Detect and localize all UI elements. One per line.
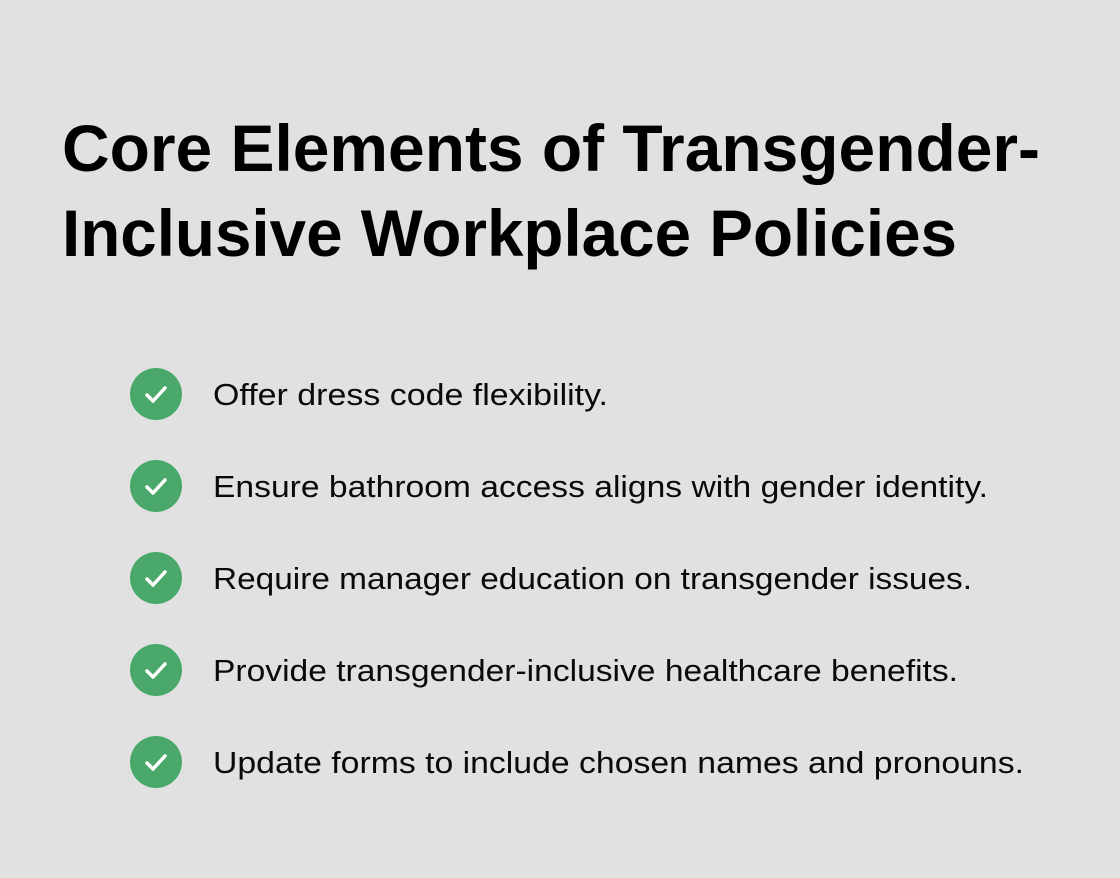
item 2: [130, 460, 988, 512]
icon: check: [130, 368, 182, 420]
title: Inclusive Workplace Policies: [62, 196, 957, 270]
text: Offer dress code flexibility.: [213, 377, 608, 412]
icon: check: [130, 736, 182, 788]
text: Update forms to include chosen names and pronouns.: [213, 745, 1024, 780]
item 1: [130, 368, 608, 420]
title: [62, 111, 1040, 270]
text: Require manager education on transgender issues.: [213, 561, 972, 596]
icon: check: [130, 644, 182, 696]
item 4: [130, 644, 958, 696]
text: Provide transgender-inclusive healthcare benefits.: [213, 653, 958, 688]
text: Ensure bathroom access aligns with gender identity.: [213, 469, 988, 504]
item 5: [130, 736, 1024, 788]
icon: check: [130, 460, 182, 512]
item 3: [130, 552, 972, 604]
title: Core Elements of Transgender-: [62, 111, 1040, 185]
icon: check: [130, 552, 182, 604]
